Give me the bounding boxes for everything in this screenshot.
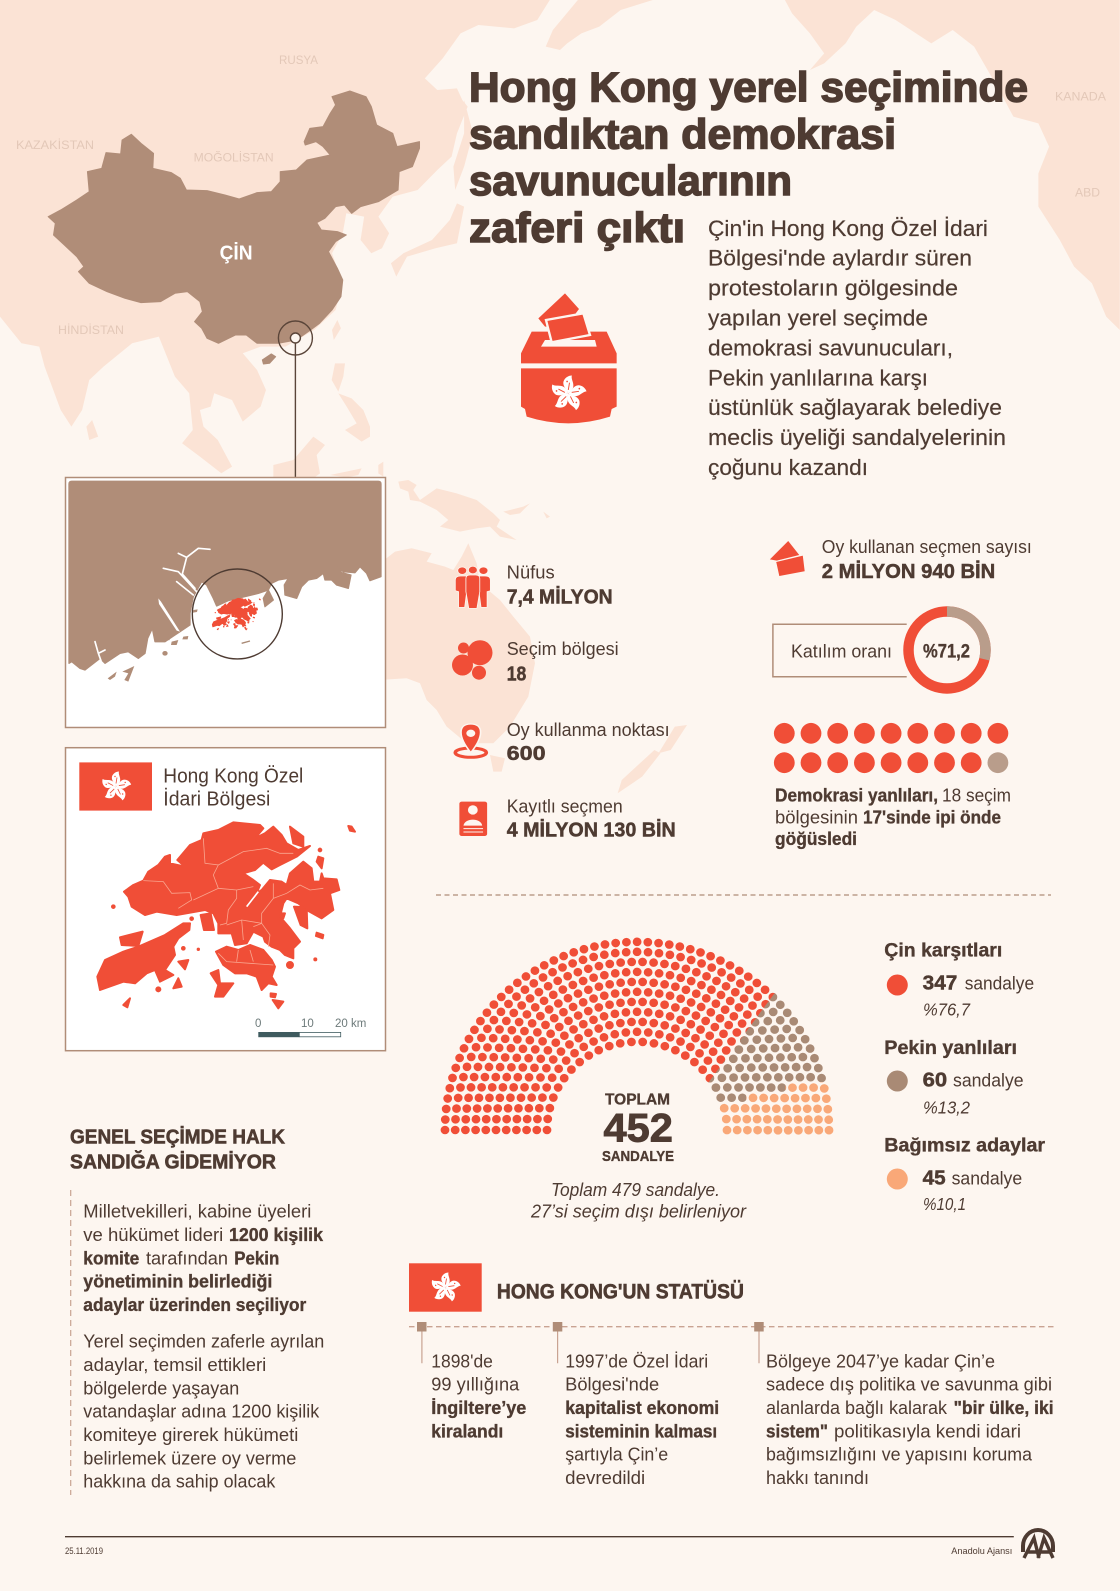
stat: registered voters: 4 MİLYON 130 BİN	[507, 819, 676, 842]
map heading: İdari Bölgesi	[163, 788, 270, 811]
general election text	[83, 1202, 324, 1492]
icon: ballot box	[521, 293, 617, 423]
legend: independents: 45	[923, 1166, 946, 1189]
Hong Kong locator callout	[278, 321, 312, 478]
legend: anti-China: %76,7	[923, 1000, 971, 1020]
scale bar	[255, 1018, 366, 1037]
map label: Rusya: RUSYA	[279, 53, 318, 67]
icon: ballot papers	[770, 541, 805, 577]
turnout box and donut: %71,2	[923, 642, 970, 663]
status heading: HONG KONG'UN STATÜSÜ	[497, 1280, 744, 1303]
general election text: adaylar, temsil ettikleri	[83, 1355, 266, 1375]
legend: independents	[884, 1135, 1046, 1214]
general election text: Yerel seçimden zaferle ayrılan	[83, 1332, 324, 1352]
date: 25.11.2019	[65, 1546, 103, 1557]
stat: election districts: Seçim bölgesi	[507, 639, 619, 659]
general election text: komite	[83, 1248, 139, 1268]
icon: id card	[459, 802, 487, 836]
stat: population: 7,4 MİLYON	[507, 585, 613, 608]
status column: 1997: Bölgesi'nde	[565, 1375, 659, 1395]
intro text: Çin'in Hong Kong Özel İdari	[708, 216, 988, 241]
status column: 2047: politikasıyla kendi idari	[834, 1421, 1021, 1441]
legend: anti-China: Çin karşıtları	[884, 940, 1002, 962]
parliament seat chart	[445, 942, 829, 1131]
status column: 2047: hakkı tanındı	[766, 1468, 869, 1488]
stat: votes cast: 2 MİLYON 940 BİN	[822, 560, 995, 583]
map label: Kanada: KANADA	[1055, 90, 1106, 104]
title: savunucularının	[469, 157, 792, 204]
title: zaferi çıktı	[469, 204, 685, 251]
stat: polling stations: 600	[507, 742, 546, 765]
intro text: Pekin yanlılarına karşı	[708, 366, 928, 391]
intro text	[708, 216, 1006, 480]
general election text: adaylar üzerinden seçiliyor	[83, 1295, 306, 1315]
general election text: Milletvekilleri, kabine üyeleri	[83, 1202, 311, 1222]
legend: pro-Beijing: Pekin yanlıları	[884, 1037, 1017, 1059]
scale bar: 10	[301, 1018, 314, 1030]
icon: location pin	[455, 724, 486, 757]
status column: 1997: kapitalist ekonomi	[565, 1398, 719, 1418]
seat total	[602, 1091, 674, 1165]
district caption: bölgesinin	[775, 807, 858, 827]
status column: 1997	[565, 1351, 719, 1488]
turnout box and donut	[773, 612, 986, 688]
status column: 1898	[431, 1351, 526, 1441]
background world map	[0, 0, 1120, 793]
seat total: SANDALYE	[602, 1148, 674, 1165]
status column: 1898: 99 yıllığına	[431, 1375, 520, 1395]
intro text: demokrasi savunucuları,	[708, 336, 953, 361]
status column: 2047: "bir ülke, iki	[954, 1398, 1054, 1418]
general election heading	[70, 1125, 285, 1173]
legend: anti-China	[884, 940, 1034, 1020]
map label: ABD: ABD	[1075, 186, 1100, 200]
icon: AA logo	[1023, 1530, 1053, 1558]
icon: circles	[452, 640, 492, 680]
status column: 2047	[766, 1351, 1054, 1488]
general election heading: SANDIĞA GİDEMİYOR	[70, 1149, 276, 1173]
legend: independents: %10,1	[923, 1194, 966, 1214]
general election text: Pekin	[234, 1248, 279, 1268]
district caption: Demokrasi yanlıları,	[775, 786, 938, 806]
status column: 1997: şartıyla Çin’e	[565, 1445, 668, 1465]
intro text: yapılan yerel seçimde	[708, 306, 928, 331]
label: Çin: ÇİN	[220, 241, 253, 264]
district caption: göğüsledi	[775, 829, 857, 849]
stat: election districts	[452, 639, 619, 686]
status column: 2047: sistem"	[766, 1421, 828, 1441]
stat: population	[455, 562, 613, 608]
agency name: Anadolu Ajansı	[951, 1546, 1012, 1557]
Hong Kong district map	[97, 822, 355, 1008]
legend: pro-Beijing	[884, 1037, 1024, 1117]
status heading	[409, 1263, 744, 1312]
legend: pro-Beijing: %13,2	[923, 1097, 970, 1117]
stat: polling stations	[455, 720, 670, 765]
scale bar: 20 km	[335, 1018, 366, 1030]
status column: 2047: Bölgeye 2047’ye kadar Çin’e	[766, 1351, 995, 1371]
district caption	[775, 786, 1011, 849]
intro text: meclis üyeliği sandalyelerinin	[708, 425, 1006, 450]
stat: registered voters: Kayıtlı seçmen	[507, 797, 623, 817]
intro text: çoğunu kazandı	[708, 455, 868, 480]
legend: independents: Bağımsız adaylar	[884, 1135, 1046, 1157]
seat note: 27’si seçim dışı belirleniyor	[530, 1202, 747, 1222]
map label: Hindistan: HİNDİSTAN	[58, 323, 124, 337]
title	[469, 64, 1028, 251]
legend: anti-China: sandalye	[965, 973, 1034, 993]
intro text: protestoların gölgesinde	[708, 276, 958, 301]
intro text: Bölgesi'nde aylardır süren	[708, 246, 972, 271]
turnout box and donut: Katılım oranı	[791, 641, 892, 661]
map label: Moğolistan: MOĞOLİSTAN	[194, 150, 274, 165]
status column: 1997: sisteminin kalması	[565, 1421, 717, 1441]
general election heading: GENEL SEÇİMDE HALK	[70, 1125, 285, 1148]
title: sandıktan demokrasi	[469, 110, 896, 158]
panel: Hong Kong map	[66, 748, 386, 1051]
stat: polling stations: Oy kullanma noktası	[507, 720, 670, 740]
status timeline	[409, 1322, 1055, 1363]
map heading: Hong Kong Özel	[163, 765, 303, 787]
seat note: Toplam 479 sandalye.	[551, 1180, 720, 1200]
status column: 1997: 1997’de Özel İdari	[565, 1351, 708, 1371]
title: Hong Kong yerel seçiminde	[469, 64, 1028, 111]
status column: 2047: sadece dış politika ve savunma gibi	[766, 1375, 1052, 1395]
general election text: tarafından	[146, 1248, 228, 1268]
icon: people	[455, 566, 490, 608]
map label: Kazakistan: KAZAKİSTAN	[16, 138, 94, 152]
seat total: TOPLAM	[605, 1091, 670, 1108]
general election text: vatandaşlar adına 1200 kişilik	[83, 1402, 320, 1422]
stat: registered voters	[459, 797, 676, 842]
stat: election districts: 18	[507, 663, 526, 686]
stat: votes cast	[770, 537, 1032, 583]
legend: anti-China: 347	[923, 971, 957, 994]
general election text: hakkına da sahip olacak	[83, 1472, 276, 1492]
map heading	[163, 765, 303, 811]
status column: 1997: devredildi	[565, 1468, 645, 1488]
seat total: 452	[604, 1107, 673, 1151]
status column: 2047: alanlarda bağlı kalarak	[766, 1398, 948, 1418]
district caption: 18 seçim	[942, 786, 1011, 806]
scale bar: 0	[255, 1018, 261, 1030]
status column: 2047: bağımsızlığını ve yapısını koruma	[766, 1445, 1033, 1465]
legend: pro-Beijing: 60	[923, 1069, 947, 1092]
stat: votes cast: Oy kullanan seçmen sayısı	[822, 537, 1032, 557]
district caption: 17'sinde ipi önde	[863, 807, 1001, 827]
general election text: yönetiminin belirlediği	[83, 1272, 272, 1292]
general election text: bölgelerde yaşayan	[83, 1378, 239, 1398]
intro text: üstünlük sağlayarak belediye	[708, 395, 1002, 420]
general election text: belirlemek üzere oy verme	[83, 1448, 296, 1468]
stat: population: Nüfus	[507, 562, 555, 582]
China map	[48, 91, 419, 364]
general election text: ve hükümet lideri	[83, 1225, 223, 1245]
general election text: 1200 kişilik	[229, 1225, 324, 1245]
general election text: komiteye girerek hükümeti	[83, 1425, 298, 1445]
status column: 1898: İngiltere’ye	[431, 1398, 526, 1418]
panel: locator map	[66, 478, 386, 728]
donut chart	[908, 612, 986, 688]
status column: 1898: kiralandı	[431, 1421, 503, 1441]
legend: independents: sandalye	[952, 1168, 1022, 1188]
status column: 1898: 1898'de	[431, 1351, 493, 1371]
flag	[79, 762, 152, 811]
district dots	[774, 723, 1008, 773]
seat note	[530, 1180, 747, 1222]
legend: pro-Beijing: sandalye	[953, 1071, 1024, 1091]
